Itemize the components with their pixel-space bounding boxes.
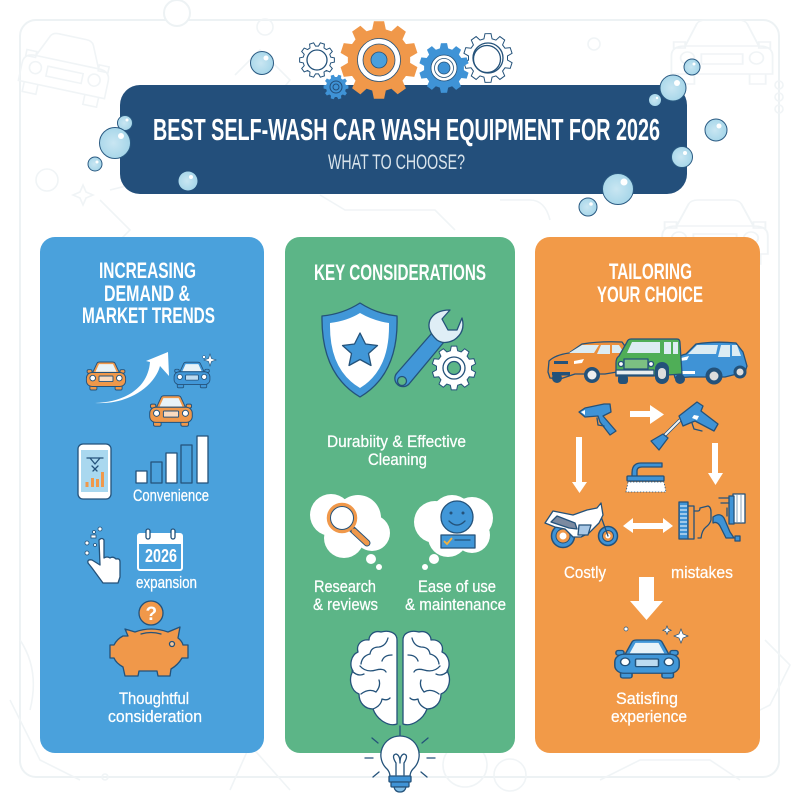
icon: calendar 2026: [138, 529, 182, 570]
arrow: down left: [572, 437, 587, 493]
label: mistakes: mistakes: [671, 563, 733, 582]
subtitle: WHAT TO CHOOSE?: [328, 151, 465, 174]
gear: small blue: [324, 75, 348, 99]
icon: spray gun: [579, 404, 616, 435]
heading: DEMAND &: [104, 281, 190, 306]
icon: sparkles: [624, 626, 688, 643]
icon: wrench: [395, 310, 463, 387]
label: research: Research: [314, 577, 376, 596]
label: satisfying experience: Satisfing: [616, 689, 678, 708]
label: durability: [327, 432, 466, 469]
gear: blue medium: [413, 37, 475, 99]
heading: [82, 258, 215, 328]
icon: blue van: [673, 342, 747, 384]
icon: cleaning tools: [679, 494, 745, 541]
heading: KEY CONSIDERATIONS: [314, 260, 486, 285]
gear: white right: [457, 28, 519, 88]
label: convenience: Convenience: [133, 486, 209, 505]
arrow: down right: [708, 443, 723, 485]
label: costly: Costly: [564, 563, 606, 582]
label: ease of use: [405, 577, 506, 614]
icon: smiley: [441, 501, 473, 533]
icon: blue car: [174, 354, 216, 388]
bar chart: [136, 436, 208, 483]
icon: calendar 2026: 2026: [145, 546, 177, 566]
icon: question mark coin: ?: [146, 604, 157, 625]
label: thoughtful consideration: [108, 689, 202, 726]
icon: check card: [441, 535, 475, 548]
heading: [597, 259, 703, 307]
icon: question mark coin: [139, 601, 163, 625]
icon: orange car: [86, 362, 126, 390]
gear: orange large: [331, 12, 427, 108]
icon: orange suv: [548, 342, 629, 383]
arrow: growth: [95, 352, 169, 403]
icon: green suv: [616, 339, 682, 384]
label: research: & reviews: [313, 595, 378, 614]
icon: brain: [351, 631, 449, 725]
label: satisfying experience: [611, 689, 687, 726]
label: durability: Cleaning: [368, 450, 427, 469]
thought bubble: ease of use: [414, 495, 493, 570]
label: durability: Durabiity & Effective: [327, 432, 466, 451]
heading: YOUR CHOICE: [597, 282, 703, 307]
icon: pressure lance: [651, 402, 718, 450]
line: brain to bulb: [399, 726, 401, 736]
icon: gear white: [427, 341, 481, 395]
gear: white left: [300, 43, 334, 77]
label: research: [313, 577, 378, 614]
soap bubbles: [88, 52, 727, 216]
icon: motorcycle: [545, 503, 618, 548]
icon: shield with star: [322, 303, 397, 397]
icon: magnifier: [328, 504, 367, 543]
icon: light bulb: [365, 736, 435, 792]
label: thoughtful consideration: Thoughtful: [119, 689, 189, 708]
title banner: [120, 85, 687, 194]
icon: scrub brush: [626, 463, 666, 492]
heading: MARKET TRENDS: [82, 303, 215, 328]
label: thoughtful consideration: consideration: [108, 707, 202, 726]
panel: tailoring your choice: [535, 237, 760, 753]
panel: key considerations: [285, 237, 515, 792]
arrow: right: [630, 405, 664, 424]
label: satisfying experience: experience: [611, 707, 687, 726]
heading: TAILORING: [609, 259, 692, 284]
icon: orange car lower: [150, 396, 192, 426]
thought bubble: research: [310, 494, 390, 570]
label: ease of use: Ease of use: [418, 577, 496, 596]
heading: INCREASING: [99, 258, 196, 283]
icon: clean blue car: [615, 640, 679, 678]
arrow: big down: [630, 577, 663, 620]
panel: increasing demand and market trends: [40, 237, 264, 753]
arrow: double: [623, 518, 673, 533]
label: expansion: expansion: [136, 573, 197, 592]
icon: phone: [78, 444, 111, 499]
icon: piggy bank: [110, 627, 188, 676]
gears cluster: [300, 12, 519, 108]
label: ease of use: & maintenance: [405, 595, 506, 614]
icon: pointing hand: [85, 527, 120, 583]
